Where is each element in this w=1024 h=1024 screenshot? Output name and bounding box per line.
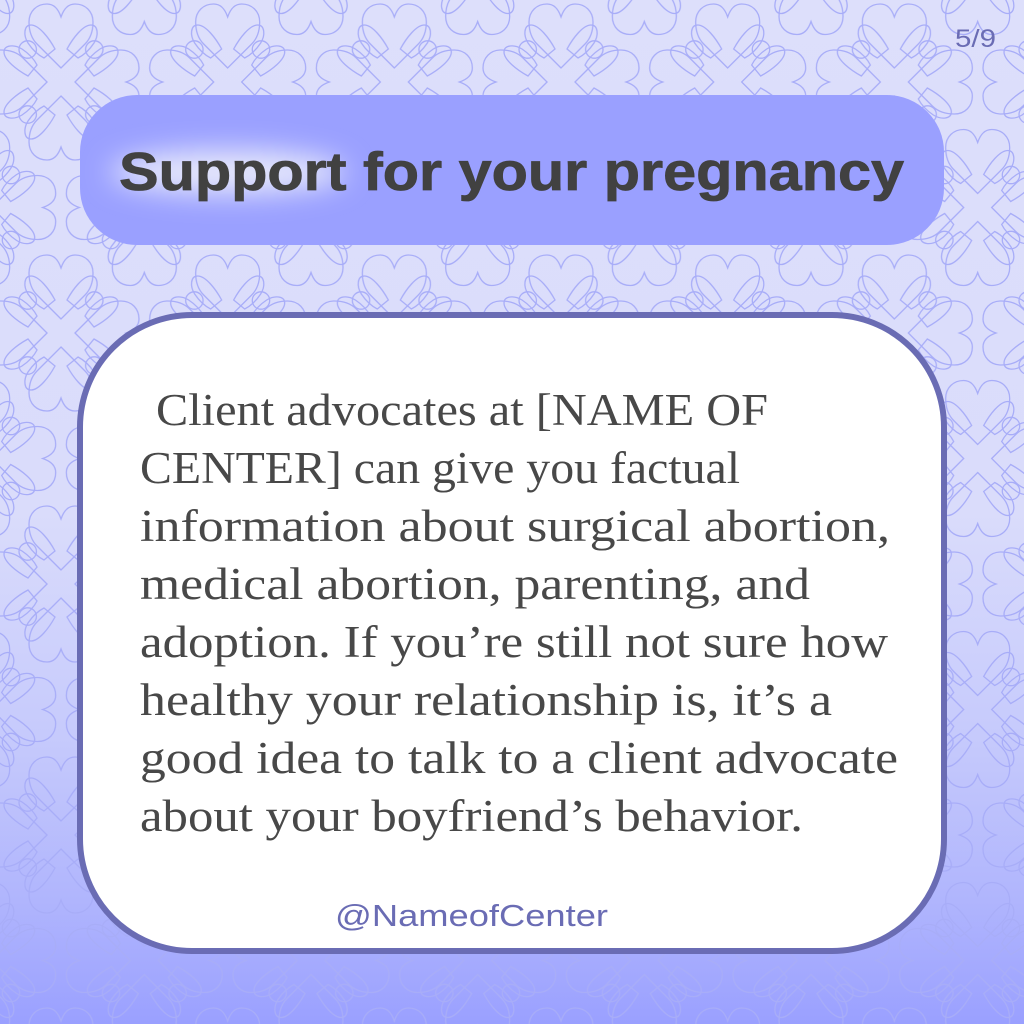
heading: Support for your pregnancy	[119, 142, 904, 202]
body text: good idea to talk to a client advocate	[140, 733, 898, 783]
body text: about your boyfriend’s behavior.	[140, 791, 803, 841]
page number: 5/9	[955, 25, 996, 53]
title banner	[80, 95, 944, 245]
body text: CENTER] can give you factual	[140, 443, 740, 493]
body text: medical abortion, parenting, and	[140, 559, 810, 609]
body text: information about surgical abortion,	[140, 501, 890, 551]
body text: Client advocates at [NAME OF	[156, 385, 768, 435]
body text	[140, 385, 898, 841]
panel: message card	[80, 315, 944, 951]
handle: @NameofCenter	[335, 898, 608, 933]
body text: adoption. If you’re still not sure how	[140, 617, 889, 667]
body text: healthy your relationship is, it’s a	[140, 675, 832, 725]
